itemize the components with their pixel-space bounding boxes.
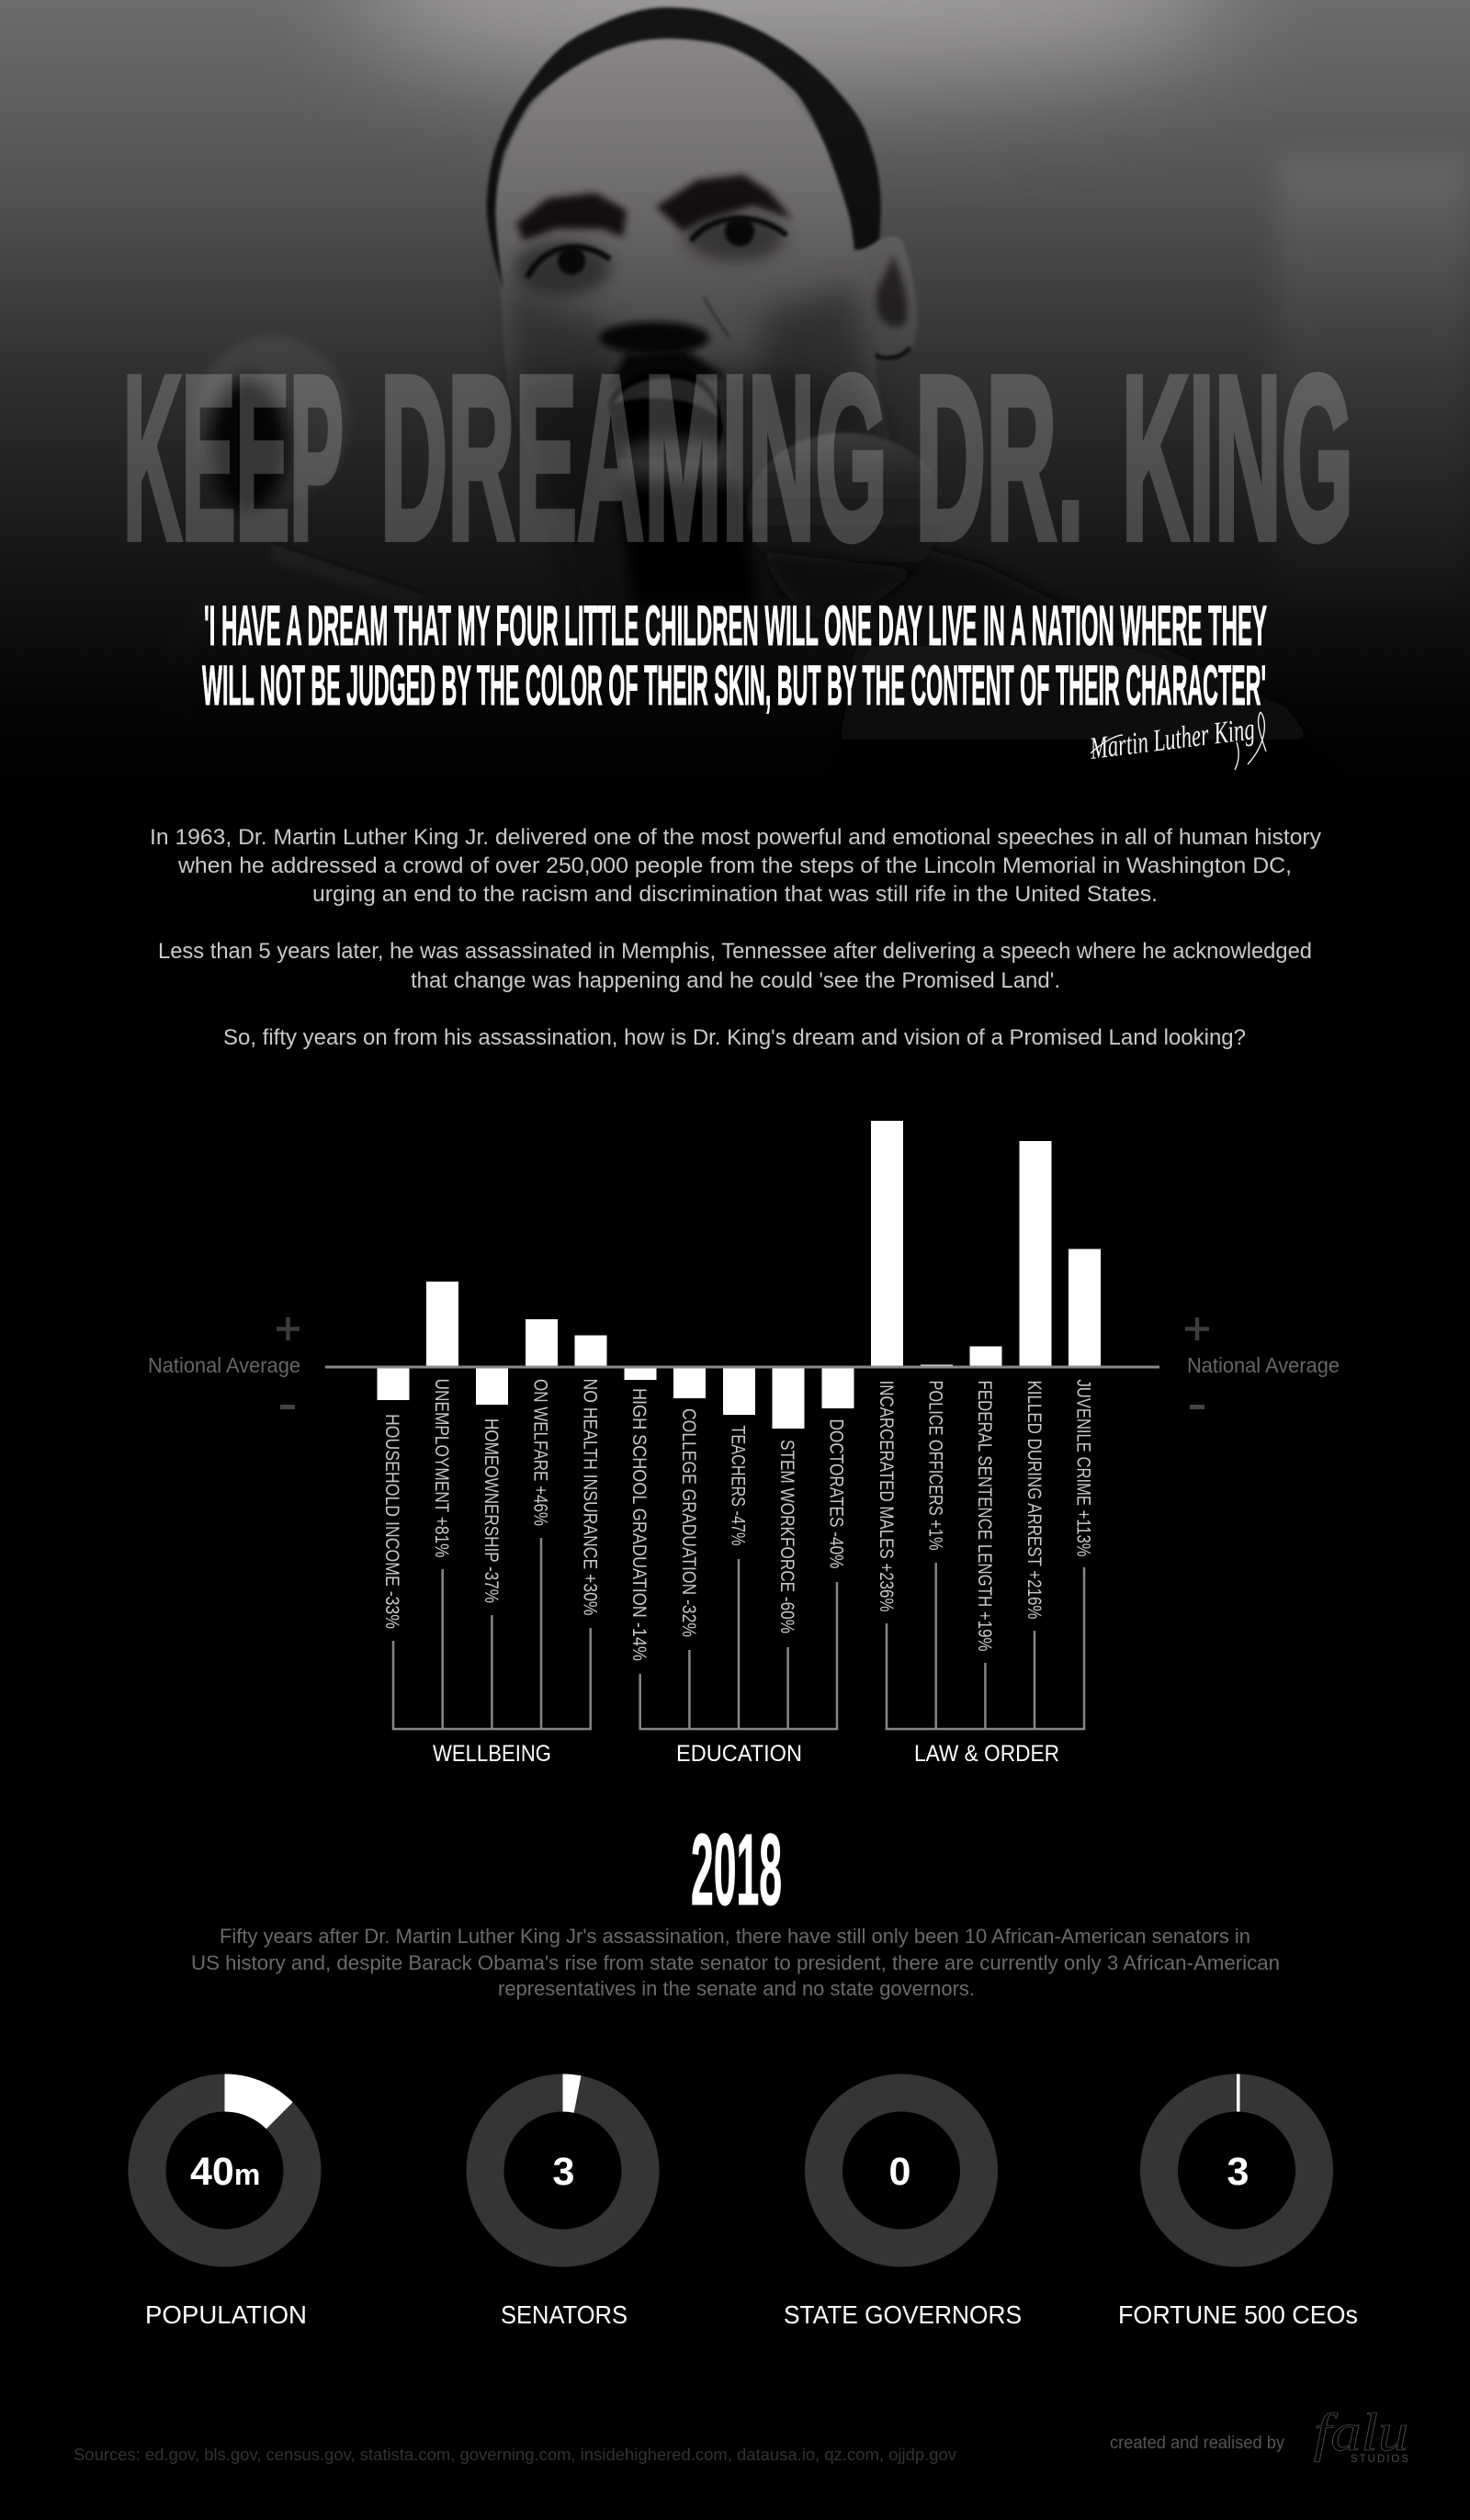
2018 paragraph: Fifty years after Dr. Martin Luther King Jr's assassination, there have still only been 10 African-American senators in bbox=[220, 1925, 1250, 1948]
right eye bbox=[685, 213, 786, 261]
left eyebrow bbox=[516, 193, 627, 241]
vertical labels: DOCTORATES -40% bbox=[825, 1418, 847, 1569]
vertical labels: COLLEGE GRADUATION -32% bbox=[678, 1408, 699, 1637]
vertical labels: JUVENILE CRIME +113% bbox=[1073, 1380, 1093, 1556]
ear bbox=[854, 237, 917, 360]
2018 paragraph bbox=[191, 1925, 1280, 2000]
sources: Sources: ed.gov, bls.gov, census.gov, statista.com, governing.com, insidehighered.com, datausa.io, qz.com, ojjdp.gov bbox=[74, 2446, 956, 2464]
national average legend: right bbox=[1185, 1317, 1340, 1409]
donut: senators: SENATORS bbox=[501, 2300, 628, 2329]
quote bbox=[202, 594, 1267, 717]
signature bbox=[1088, 712, 1266, 770]
vertical labels: HOUSEHOLD INCOME -33% bbox=[381, 1414, 402, 1629]
intro text: In 1963, Dr. Martin Luther King Jr. delivered one of the most powerful and emotional speeches in all of human history bbox=[150, 825, 1321, 850]
signature: Martin Luther King bbox=[1088, 712, 1257, 766]
vertical labels: ON WELFARE +46% bbox=[529, 1379, 551, 1526]
2018 paragraph: representatives in the senate and no state governors. bbox=[498, 1977, 975, 2000]
vertical labels: STEM WORKFORCE -60% bbox=[776, 1440, 797, 1633]
vertical labels: HOMEOWNERSHIP -37% bbox=[481, 1418, 502, 1603]
national average legend: left: National Average bbox=[148, 1353, 300, 1377]
donut: state governors bbox=[784, 2093, 1022, 2329]
text: 2018 bbox=[691, 1814, 782, 1927]
bar chart: national average comparison bbox=[148, 1121, 1340, 1767]
vertical labels: FEDERAL SENTENCE LENGTH +19% bbox=[974, 1380, 995, 1652]
vertical labels: KILLED DURING ARREST +216% bbox=[1023, 1380, 1045, 1619]
logo: falu studios: STUDIOS bbox=[1351, 2454, 1408, 2465]
donut: population bbox=[145, 2074, 307, 2329]
bars bbox=[377, 1121, 1101, 1429]
intro text: Less than 5 years later, he was assassinated in Memphis, Tennessee after delivering a speech where he acknowledged bbox=[158, 939, 1312, 964]
hair bbox=[487, 7, 881, 291]
intro text bbox=[150, 825, 1321, 1050]
national average legend: right: National Average bbox=[1187, 1353, 1340, 1377]
donut: senators: 3 bbox=[553, 2150, 574, 2194]
vertical labels: UNEMPLOYMENT +81% bbox=[431, 1378, 452, 1558]
donut: state governors: STATE GOVERNORS bbox=[784, 2300, 1022, 2329]
photo: Dr. King at the microphones bbox=[0, 0, 1470, 790]
group labels: LAW & ORDER bbox=[914, 1741, 1059, 1767]
title: DR. bbox=[915, 327, 1084, 588]
intro text: So, fifty years on from his assassination, how is Dr. King's dream and vision of a Promised Land looking? bbox=[223, 1025, 1246, 1050]
title: KEEP bbox=[123, 327, 344, 588]
left eye bbox=[514, 241, 610, 296]
vertical labels: POLICE OFFICERS +1% bbox=[924, 1380, 946, 1551]
group brackets bbox=[393, 1538, 1084, 1729]
group labels bbox=[433, 1741, 1059, 1767]
group labels: WELLBEING bbox=[433, 1741, 551, 1767]
donut: senators bbox=[485, 2074, 640, 2329]
right eyebrow bbox=[656, 175, 792, 232]
group labels: EDUCATION bbox=[676, 1741, 802, 1767]
credit: created and realised by bbox=[1110, 2434, 1284, 2453]
face shading bbox=[508, 276, 634, 588]
vertical labels bbox=[381, 1378, 1093, 1661]
donut: fortune 500 ceos bbox=[1118, 2074, 1358, 2329]
mouth bbox=[608, 369, 723, 459]
donut: fortune 500 ceos: 3 bbox=[1227, 2150, 1249, 2194]
vertical labels: NO HEALTH INSURANCE +30% bbox=[579, 1378, 601, 1615]
intro text: when he addressed a crowd of over 250,000 people from the steps of the Lincoln Memorial in Washington DC, bbox=[177, 853, 1292, 878]
donut: population: POPULATION bbox=[145, 2300, 307, 2329]
right microphone bbox=[748, 433, 944, 589]
donut: population: 40m bbox=[190, 2150, 260, 2194]
national average legend: left bbox=[148, 1317, 300, 1409]
intro text: that change was happening and he could 'see the Promised Land'. bbox=[411, 968, 1060, 993]
logo: falu studios: falu bbox=[1314, 2402, 1408, 2462]
nose bbox=[599, 322, 709, 355]
vertical labels: INCARCERATED MALES +236% bbox=[876, 1380, 897, 1611]
head bbox=[495, 37, 910, 606]
donut: fortune 500 ceos: FORTUNE 500 CEOs bbox=[1118, 2300, 1358, 2329]
2018 paragraph: US history and, despite Barack Obama's rise from state senator to president, there are currently only 3 African-American bbox=[191, 1951, 1280, 1974]
left microphone bbox=[194, 336, 350, 505]
vertical labels: TEACHERS -47% bbox=[728, 1426, 748, 1545]
suit bbox=[827, 537, 1351, 790]
baseline bbox=[325, 1365, 1159, 1369]
fade to black bbox=[0, 0, 1470, 790]
vertical labels: HIGH SCHOOL GRADUATION -14% bbox=[628, 1388, 650, 1661]
donut: state governors: 0 bbox=[889, 2150, 910, 2194]
intro text: urging an end to the racism and discrimination that was still rife in the United States. bbox=[312, 882, 1158, 907]
